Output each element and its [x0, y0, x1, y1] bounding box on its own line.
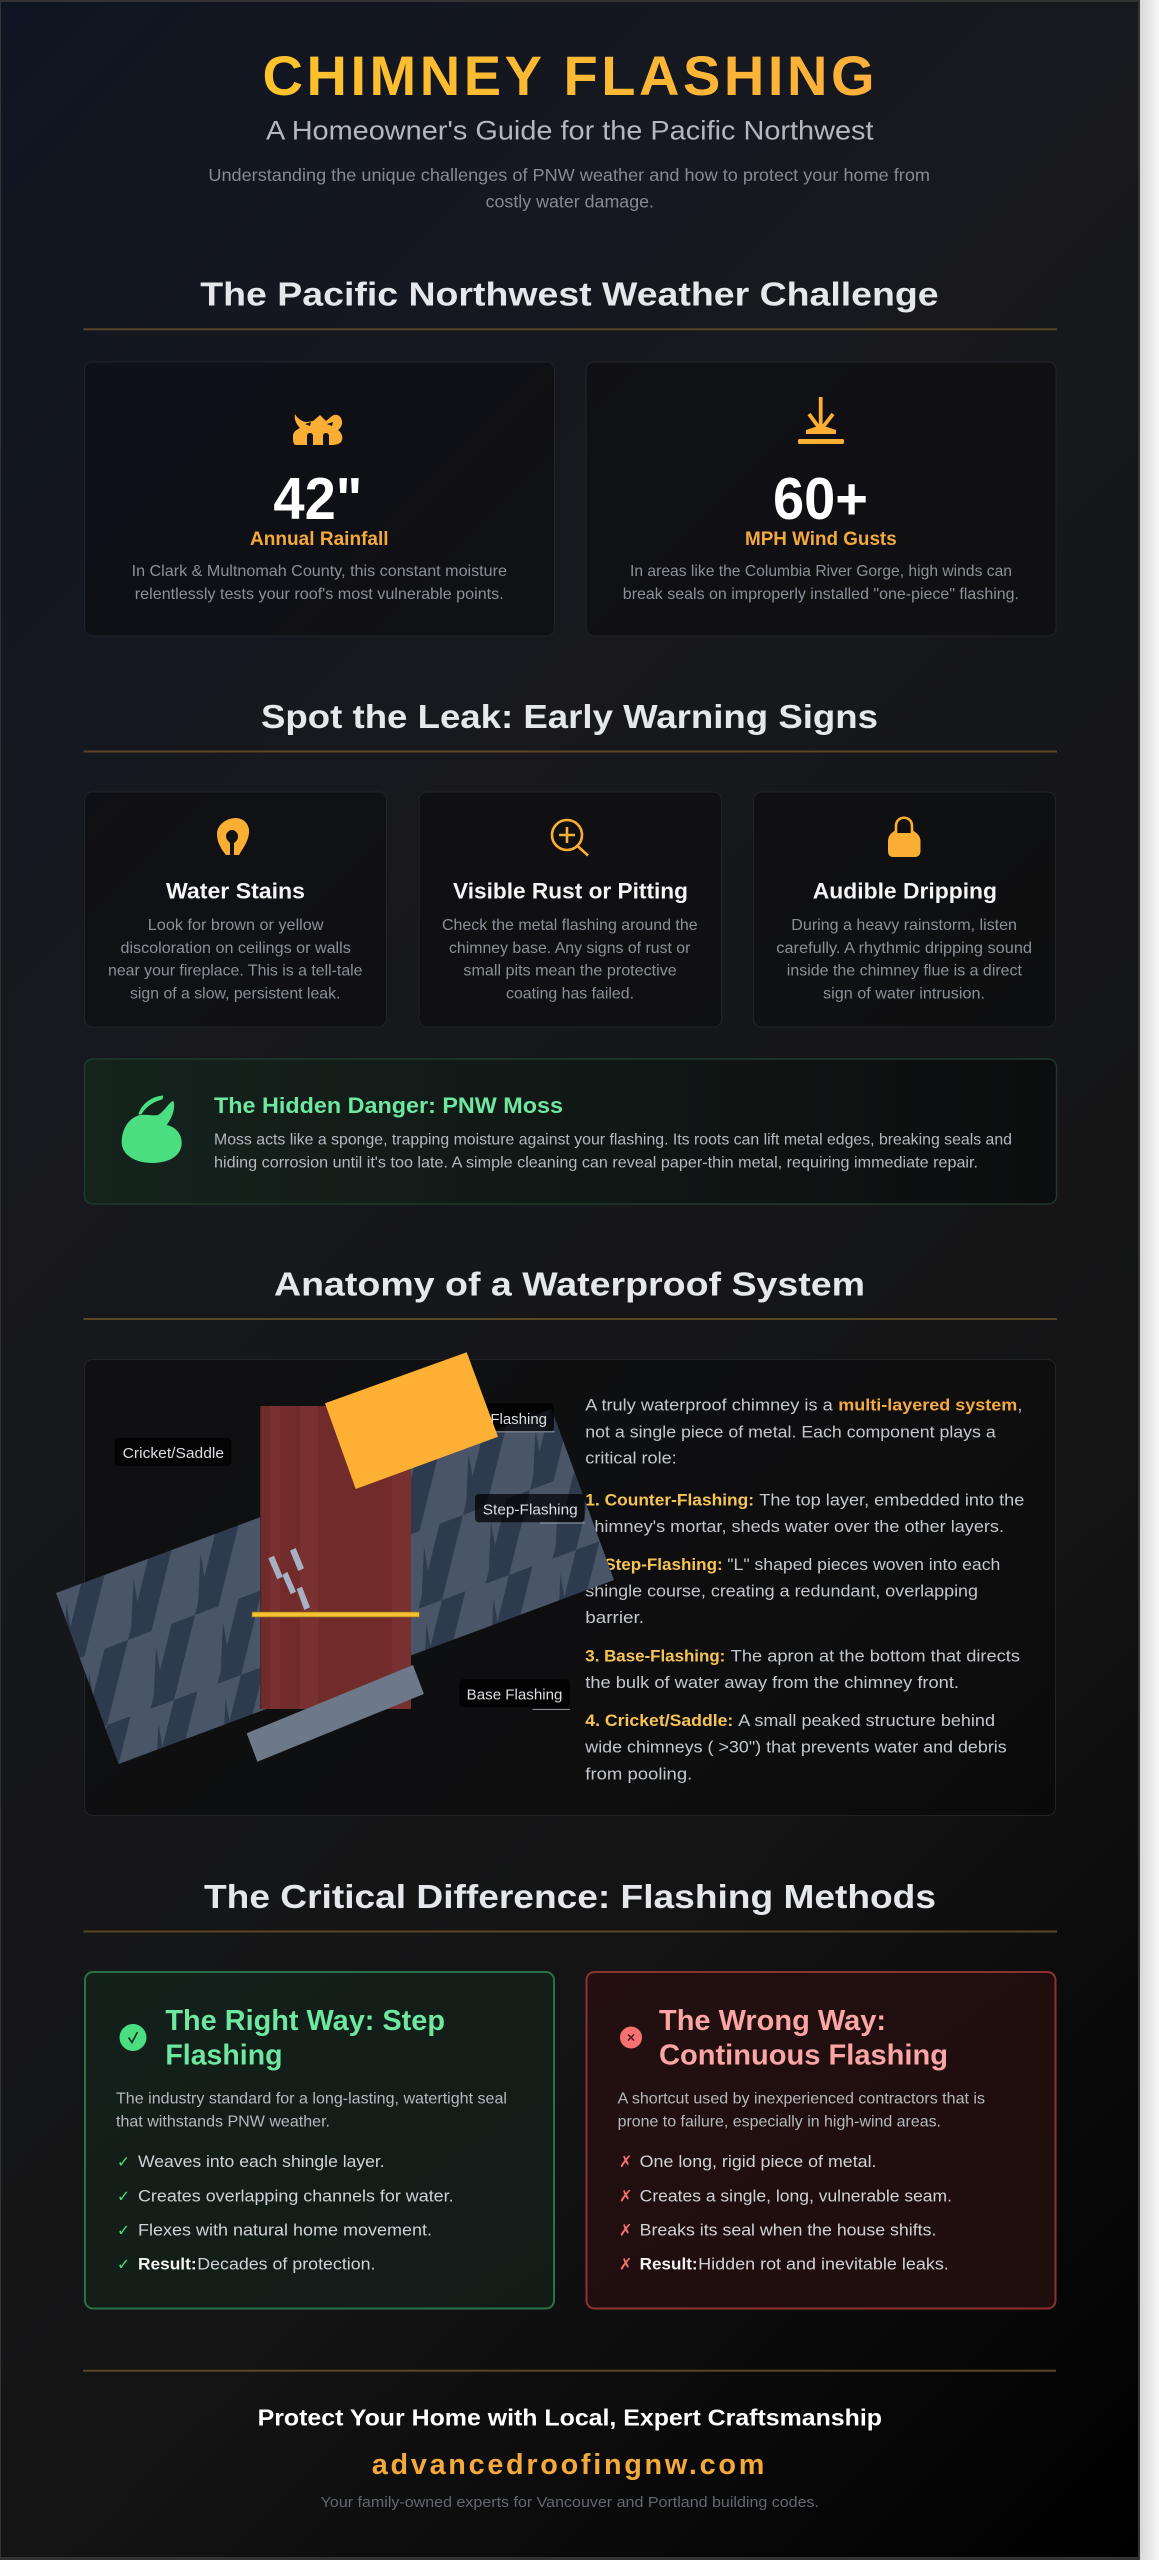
icon: rain [293, 414, 342, 445]
icon: wind arrow [798, 397, 844, 444]
icon: x circle [620, 2026, 642, 2048]
x list: ✗ [619, 2186, 632, 2205]
card title: Water Stains [166, 878, 305, 903]
panel: annual rainfall [84, 362, 554, 636]
description: break seals on improperly installed "one-piece" flashing. [623, 586, 1019, 603]
panel: anatomy [84, 1360, 1056, 1816]
checklist: Result: [138, 2254, 197, 2273]
section: warning signs [84, 698, 1057, 1204]
panel title [659, 2005, 948, 2071]
explanation text: barrier. [585, 1608, 644, 1627]
header [208, 44, 930, 211]
callout text: hiding corrosion until it's too late. A simple cleaning can reveal paper-thin metal, requiring immediate repair. [214, 1155, 978, 1172]
heading: The Critical Difference: Flashing Methods [204, 1878, 936, 1915]
description: In Clark & Multnomah County, this constant moisture [132, 563, 507, 580]
icon: magnifier [552, 820, 588, 856]
description [132, 563, 507, 603]
checklist: Creates overlapping channels for water. [138, 2186, 454, 2205]
description: inside the chimney flue is a direct [787, 963, 1023, 980]
footer heading: Protect Your Home with Local, Expert Craftsmanship [258, 2404, 882, 2430]
intro text [208, 165, 930, 211]
intro text: Understanding the unique challenges of PNW weather and how to protect your home from [208, 165, 930, 185]
description: near your fireplace. This is a tell-tale [108, 963, 362, 980]
description: discoloration on ceilings or walls [120, 940, 351, 957]
title: CHIMNEY FLASHING [262, 44, 874, 107]
panel: wrong way [586, 1972, 1056, 2308]
description: In areas like the Columbia River Gorge, high winds can [630, 563, 1012, 580]
panel description [618, 2090, 985, 2130]
icon: water drop [217, 818, 249, 855]
mortar seam line [252, 1612, 419, 1617]
description: carefully. A rhythmic dripping sound [776, 940, 1032, 957]
explanation text: not a single piece of metal. Each component plays a [585, 1422, 996, 1441]
description: coating has failed. [506, 986, 634, 1003]
callout text: Moss acts like a sponge, trapping moisture against your flashing. Its roots can lift metal edges, breaking seals and [214, 1132, 1012, 1149]
label: counter flashing [425, 1403, 554, 1432]
panel description: prone to failure, especially in high-wind areas. [618, 2113, 941, 2130]
explanation text: A truly waterproof chimney is a [585, 1396, 833, 1415]
label: cricket saddle [115, 1438, 231, 1466]
explanation text: 4. Cricket/Saddle: [585, 1711, 733, 1730]
stat: 60+: 60+ [773, 466, 868, 532]
panel title: The Wrong Way: [659, 2005, 886, 2037]
stat label: Annual Rainfall [250, 529, 389, 550]
explanation text: 2. Step-Flashing: [585, 1555, 723, 1574]
x list: One long, rigid piece of metal. [640, 2152, 876, 2171]
panel title: Flashing [165, 2039, 282, 2071]
x list: Breaks its seal when the house shifts. [640, 2220, 936, 2239]
x list: ✗ [619, 2152, 632, 2171]
x list [619, 2152, 952, 2273]
explanation text: the bulk of water away from the chimney front. [585, 1673, 959, 1692]
callout text [214, 1132, 1012, 1172]
tagline: Your family-owned experts for Vancouver and Portland building codes. [321, 2494, 819, 2511]
explanation text: multi-layered system [838, 1396, 1017, 1415]
section: anatomy [56, 1266, 1057, 1816]
heading: Spot the Leak: Early Warning Signs [261, 698, 878, 735]
explanation text: , [1018, 1396, 1022, 1415]
explanation text: "L" shaped pieces woven into each [727, 1555, 1000, 1574]
panel: rust or pitting [419, 792, 722, 1027]
description: sign of a slow, persistent leak. [130, 986, 340, 1003]
heading: Anatomy of a Waterproof System [274, 1266, 865, 1302]
description: Look for brown or yellow [148, 917, 324, 934]
stat: 42 inches: 42" [273, 466, 362, 532]
panel title: Continuous Flashing [659, 2039, 948, 2071]
panel: wind gusts [586, 362, 1056, 636]
checklist [117, 2152, 454, 2273]
description [442, 917, 698, 1003]
icon: lock [888, 818, 920, 857]
description: sign of water intrusion. [823, 986, 985, 1003]
panel description: The industry standard for a long-lasting, watertight seal [116, 2090, 507, 2107]
label: counter flashing: Counter-Flashing [432, 1411, 547, 1428]
icon: moss [122, 1096, 182, 1163]
subtitle: A Homeowner's Guide for the Pacific Northwest [266, 115, 874, 145]
description [776, 917, 1032, 1003]
callout title: The Hidden Danger: PNW Moss [214, 1093, 563, 1118]
checklist: Weaves into each shingle layer. [138, 2152, 385, 2171]
checklist: ✓ [117, 2187, 130, 2205]
description: Check the metal flashing around the [442, 917, 698, 934]
checklist: Flexes with natural home movement. [138, 2220, 432, 2239]
checklist: ✓ [117, 2153, 130, 2171]
intro text: costly water damage. [486, 191, 654, 211]
diagram: chimney anatomy [56, 1352, 614, 1764]
label: base flashing [459, 1679, 570, 1710]
x list: Creates a single, long, vulnerable seam. [640, 2186, 952, 2205]
card title: Audible Dripping [813, 878, 997, 903]
explanation text: A small peaked structure behind [738, 1711, 995, 1730]
panel: audible dripping [754, 792, 1056, 1027]
panel description: that withstands PNW weather. [116, 2113, 330, 2130]
label: step flashing [475, 1494, 585, 1524]
explanation text: chimney's mortar, sheds water over the other layers. [585, 1517, 1004, 1536]
description: small pits mean the protective [463, 963, 677, 980]
x list: ✗ [619, 2220, 632, 2239]
explanation text: from pooling. [585, 1764, 692, 1783]
label: step flashing: Step-Flashing [483, 1501, 578, 1518]
description [623, 563, 1019, 603]
x list: Result: [640, 2254, 698, 2273]
x list: Hidden rot and inevitable leaks. [698, 2254, 949, 2273]
description: During a heavy rainstorm, listen [791, 917, 1017, 934]
explanation text [584, 1396, 1024, 1783]
panel: right way [85, 1972, 554, 2308]
explanation text: The apron at the bottom that directs [731, 1646, 1020, 1665]
card title: Visible Rust or Pitting [453, 878, 688, 903]
callout: moss [84, 1059, 1056, 1204]
panel title: The Right Way: Step [165, 2005, 445, 2037]
explanation text: wide chimneys ( >30") that prevents water and debris [584, 1738, 1007, 1757]
explanation text: shingle course, creating a redundant, overlapping [585, 1582, 978, 1601]
description [108, 917, 362, 1003]
description: relentlessly tests your roof's most vulnerable points. [135, 586, 504, 603]
heading: The Pacific Northwest Weather Challenge [200, 276, 939, 313]
panel: water stains [84, 792, 386, 1027]
label: base flashing: Base Flashing [467, 1686, 562, 1703]
base flashing [247, 1665, 424, 1762]
description: chimney base. Any signs of rust or [449, 940, 690, 957]
roof shingles [56, 1409, 614, 1764]
explanation text: 1. Counter-Flashing: [585, 1490, 754, 1509]
counter flashing block [325, 1352, 498, 1489]
checklist: Decades of protection. [197, 2254, 376, 2273]
explanation text: The top layer, embedded into the [759, 1490, 1024, 1509]
explanation text: critical role: [585, 1449, 677, 1468]
panel title [165, 2005, 445, 2071]
section: weather challenge [84, 276, 1057, 636]
label: cricket saddle: Cricket/Saddle [123, 1445, 224, 1462]
checklist: ✓ [117, 2255, 130, 2273]
section: flashing methods [84, 1878, 1057, 2308]
panel description [116, 2090, 507, 2130]
stat label: MPH Wind Gusts [745, 529, 897, 550]
icon: check circle [120, 2024, 146, 2051]
explanation text: 3. Base-Flashing: [585, 1646, 725, 1665]
chimney [260, 1406, 411, 1709]
website: advancedroofingnw.com [372, 2449, 764, 2481]
footer [83, 2370, 1056, 2511]
panel description: A shortcut used by inexperienced contractors that is [618, 2090, 985, 2107]
step flashing pieces [268, 1548, 310, 1610]
checklist: ✓ [117, 2221, 130, 2239]
x list: ✗ [619, 2254, 632, 2273]
